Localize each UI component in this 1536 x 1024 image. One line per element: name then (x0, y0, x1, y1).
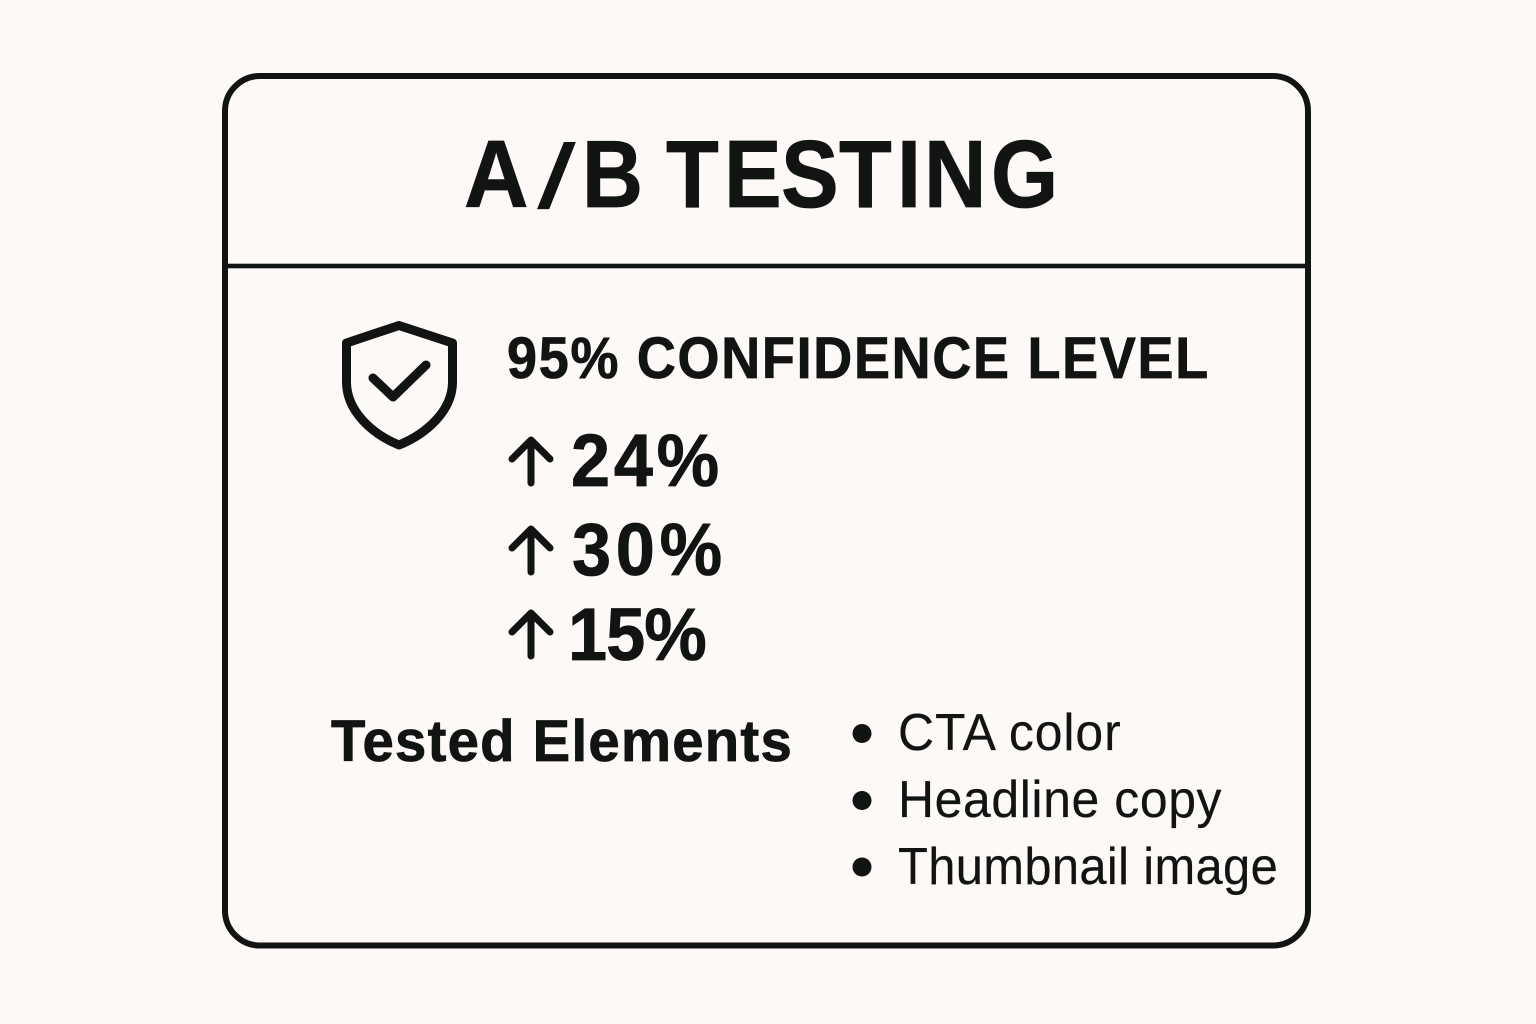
list item: Thumbnail image: Thumbnail image (898, 837, 1278, 895)
title: A (464, 120, 528, 228)
title: B (582, 121, 643, 228)
list item: CTA color: CTA color (898, 703, 1121, 761)
stat: up 24%: 24% (571, 420, 719, 502)
icon: shield with check (346, 326, 452, 445)
title: / (533, 126, 579, 226)
list: tested elements (852, 703, 1278, 895)
panel: A/B testing card (225, 76, 1308, 946)
heading: confidence level: 95% CONFIDENCE LEVEL (507, 325, 1208, 390)
title: TESTING (666, 121, 1058, 228)
stat: up 15%: 15% (568, 594, 707, 676)
title (464, 120, 1058, 228)
list item: Headline copy: Headline copy (898, 770, 1222, 828)
stat: up 30%: 30% (572, 509, 722, 591)
heading: tested elements: Tested Elements (331, 709, 792, 774)
